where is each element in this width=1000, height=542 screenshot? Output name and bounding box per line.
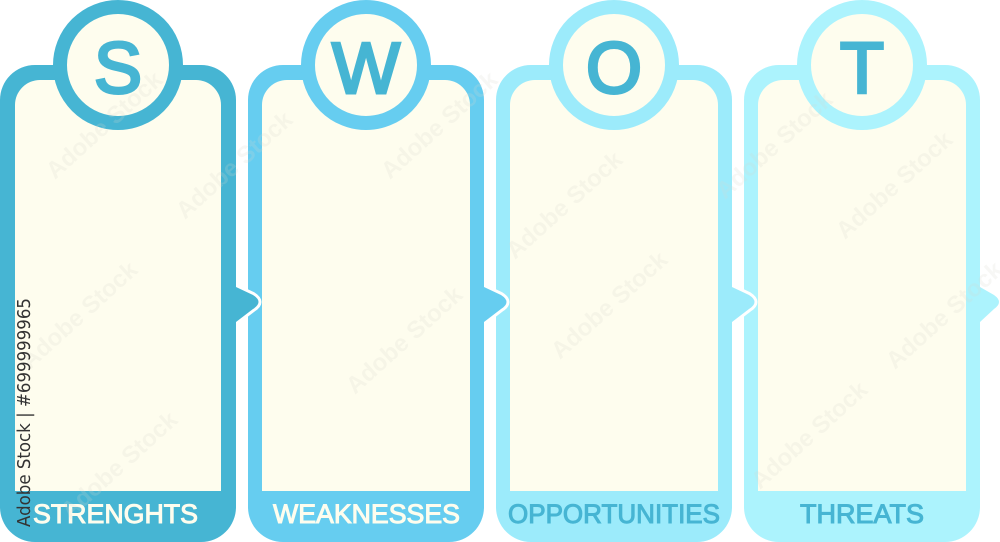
badge: W <box>308 7 424 123</box>
badge: W: W <box>332 29 400 109</box>
watermarks: Adobe Stock <box>831 126 959 244</box>
panel: threats <box>744 7 999 542</box>
badge: T: T <box>840 29 884 109</box>
label: opportunities: OPPORTUNITIES <box>508 499 720 529</box>
watermarks: Adobe Stock <box>56 406 184 524</box>
watermarks: Adobe Stock <box>711 86 839 204</box>
watermarks: Adobe Stock <box>341 281 469 399</box>
badge: O: O <box>586 29 642 109</box>
badge: S: S <box>94 29 142 109</box>
watermarks: Adobe Stock <box>376 66 504 184</box>
watermarks: Adobe Stock <box>501 146 629 264</box>
stock id text: Adobe Stock | #699999965 <box>15 298 35 527</box>
label: threats: THREATS <box>800 499 924 529</box>
watermarks: Adobe Stock <box>746 376 874 494</box>
watermarks: Adobe Stock <box>16 256 144 374</box>
watermarks: Adobe Stock <box>546 246 674 364</box>
label: strengths: STRENGHTS <box>33 499 198 529</box>
badge: S <box>60 7 176 123</box>
badge: T <box>804 7 920 123</box>
panel: opportunities <box>496 7 754 542</box>
badge: O <box>556 7 672 123</box>
watermarks: Adobe Stock <box>41 66 169 184</box>
label: weaknesses: WEAKNESSES <box>273 499 460 529</box>
panel: weaknesses <box>248 7 506 542</box>
panel: strengths <box>0 7 258 542</box>
watermarks: Adobe Stock <box>171 106 299 224</box>
